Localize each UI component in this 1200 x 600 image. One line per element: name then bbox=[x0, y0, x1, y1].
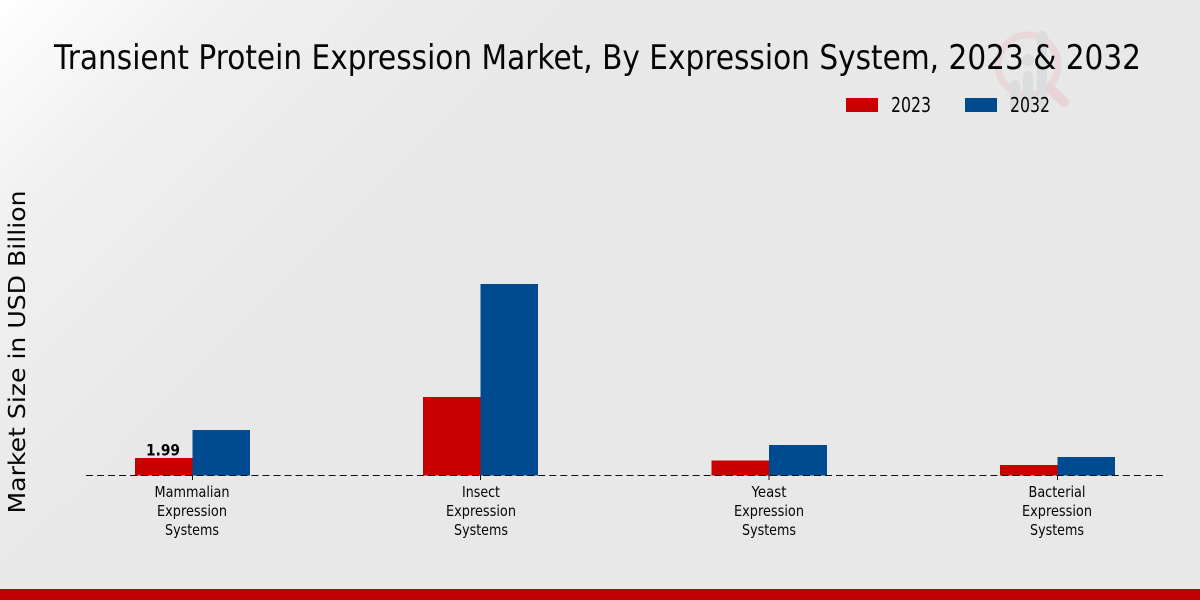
category label: Insect: Expression bbox=[446, 502, 516, 520]
data label: 1.99 bbox=[146, 440, 180, 460]
legend item: 2032 bbox=[965, 93, 1050, 117]
category label: Bacterial bbox=[1022, 483, 1092, 539]
bar chart bbox=[86, 284, 1163, 480]
category label: Insect: Systems bbox=[454, 521, 508, 539]
x-axis baseline bbox=[86, 474, 1163, 476]
category label: Yeast: Systems bbox=[742, 521, 796, 539]
category label: Yeast: Expression bbox=[734, 502, 804, 520]
bars: Yeast bbox=[712, 445, 827, 476]
icon: watermark logo bbox=[998, 31, 1064, 112]
legend bbox=[846, 93, 1050, 117]
category label: Bacterial: Systems bbox=[1030, 521, 1084, 539]
footer bar bbox=[0, 589, 1200, 600]
category label: Bacterial: Bacterial bbox=[1028, 483, 1086, 501]
legend item: 2023: 2023 bbox=[891, 93, 931, 117]
bars: Mammalian bbox=[135, 430, 250, 476]
category label: Mammalian bbox=[154, 483, 230, 539]
category label: Insect: Insect bbox=[462, 483, 500, 501]
legend item: 2032: 2032 bbox=[1010, 93, 1050, 117]
category label: Mammalian: Expression bbox=[157, 502, 227, 520]
category label: Yeast: Yeast bbox=[751, 483, 786, 501]
category label: Yeast bbox=[734, 483, 804, 539]
category label: Insect bbox=[446, 483, 516, 539]
category label: Mammalian: Mammalian bbox=[154, 483, 230, 501]
bars: Bacterial bbox=[1000, 457, 1115, 476]
category label: Mammalian: Systems bbox=[165, 521, 219, 539]
legend item: 2023 bbox=[846, 93, 931, 117]
category label: Bacterial: Expression bbox=[1022, 502, 1092, 520]
bars: Insect bbox=[423, 284, 538, 476]
y-axis label: Market Size in USD Billion bbox=[5, 190, 31, 514]
